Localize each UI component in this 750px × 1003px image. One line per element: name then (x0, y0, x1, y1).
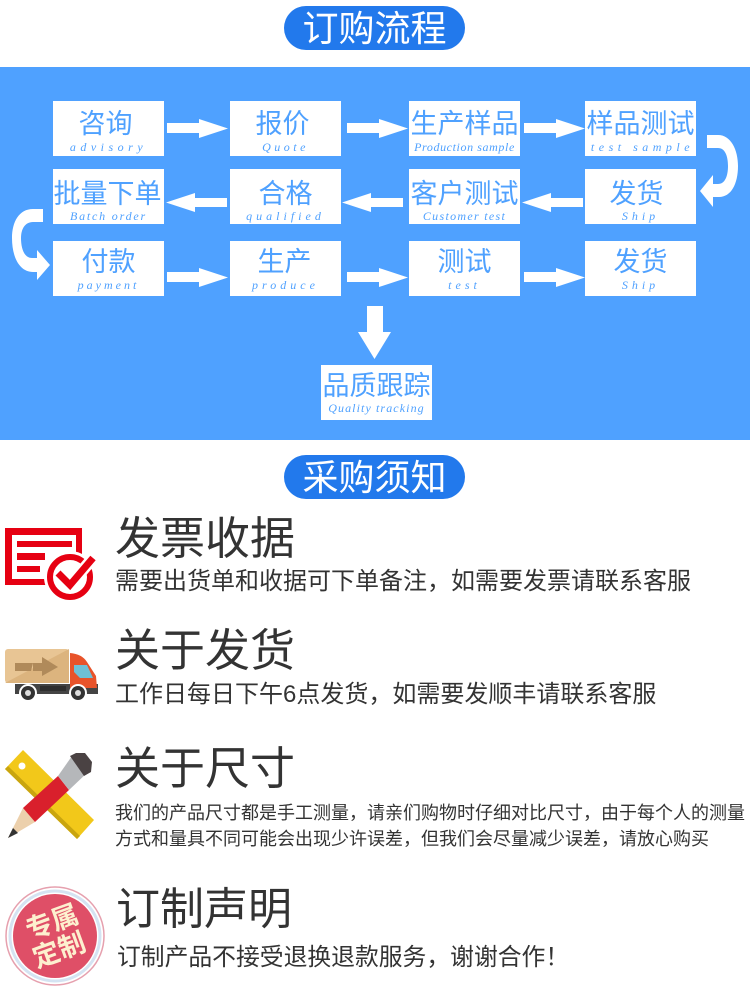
icon: custom badge: 定制 (29, 927, 90, 974)
heading: customization: 订制声明 (116, 885, 292, 934)
text: invoice note: 需要出货单和收据可下单备注，如需要发票请联系客服 (115, 568, 691, 595)
step: produce: 生产 (258, 247, 312, 277)
arrow: test to ship (524, 268, 585, 287)
arrow: customer test to qualified (342, 193, 403, 212)
step: sample test (585, 101, 696, 156)
text: size note line 2: 方式和量具不同可能会出现少许误差，但我们会尽量减少误差，请放心购买 (115, 829, 709, 849)
icon: custom badge: 专属 (22, 899, 83, 946)
step: ship: Ship (622, 209, 659, 223)
step: qualified: qualified (246, 209, 325, 223)
step: quote: 报价 (256, 109, 310, 139)
step: qualified: 合格 (258, 179, 312, 209)
step: test: test (448, 278, 481, 292)
arrow: consult to quote (167, 119, 228, 138)
arrow: qualified to batch order (166, 193, 227, 212)
step: ship (585, 169, 696, 224)
step: batch order (53, 169, 164, 224)
step: sample production: 生产样品 (410, 109, 518, 139)
step: customer test (409, 169, 520, 224)
step: test: 测试 (438, 247, 492, 277)
heading pill: order process: 订购流程 (302, 8, 446, 49)
step: sample test: 样品测试 (586, 109, 694, 139)
step: payment: payment (78, 278, 139, 292)
step: final ship: Ship (622, 278, 659, 292)
step: produce: produce (252, 278, 319, 292)
icon: delivery truck (5, 649, 98, 700)
step: sample production: Production sample (414, 140, 515, 154)
arrow: down to quality tracking (358, 306, 391, 359)
arrow: quote to sample production (347, 119, 408, 138)
step: consult: 咨询 (78, 109, 132, 139)
step: customer test: Customer test (423, 209, 506, 223)
step: quality tracking: Quality tracking (328, 401, 425, 415)
step: payment (53, 241, 164, 296)
step: batch order: Batch order (70, 209, 147, 223)
panel: process flow (0, 67, 750, 440)
heading: size: 关于尺寸 (115, 743, 295, 794)
step: customer test: 客户测试 (410, 179, 518, 209)
text: shipping note: 工作日每日下午6点发货，如需要发顺丰请联系客服 (115, 681, 656, 708)
arrow: curved left (12, 209, 50, 280)
step: sample production (409, 101, 520, 156)
icon: ruler and pencil (5, 750, 94, 839)
icon: invoice with check (5, 528, 96, 600)
heading: invoice: 发票收据 (115, 513, 295, 564)
text: customization note: 订制产品不接受退换退款服务，谢谢合作！ (117, 944, 569, 971)
step: quote: Quote (262, 140, 309, 154)
text: size note line 1: 我们的产品尺寸都是手工测量，请亲们购物时仔细对比尺寸，由于每个人的测量 (115, 803, 745, 823)
step: quality tracking (321, 365, 432, 420)
step: final ship (585, 241, 696, 296)
icon: custom badge (5, 886, 105, 986)
step: test (409, 241, 520, 296)
step: qualified (230, 169, 341, 224)
arrow: sample production to sample test (524, 119, 585, 138)
heading: shipping: 关于发货 (115, 625, 295, 676)
step: payment: 付款 (82, 247, 136, 277)
step: produce (230, 241, 341, 296)
step: final ship: 发货 (614, 247, 668, 277)
step: consult: advisory (70, 140, 147, 154)
step: quote (230, 101, 341, 156)
arrow: produce to test (347, 268, 408, 287)
arrow: payment to produce (167, 268, 228, 287)
step: batch order: 批量下单 (54, 179, 162, 209)
step: sample test: test sample (591, 140, 694, 154)
step: consult (53, 101, 164, 156)
arrow: curved right (700, 135, 738, 207)
heading pill: purchase notes: 采购须知 (302, 457, 446, 498)
flow arrows (12, 119, 738, 359)
step: quality tracking: 品质跟踪 (322, 371, 430, 401)
arrow: ship to customer test (522, 193, 583, 212)
step: ship: 发货 (610, 179, 664, 209)
